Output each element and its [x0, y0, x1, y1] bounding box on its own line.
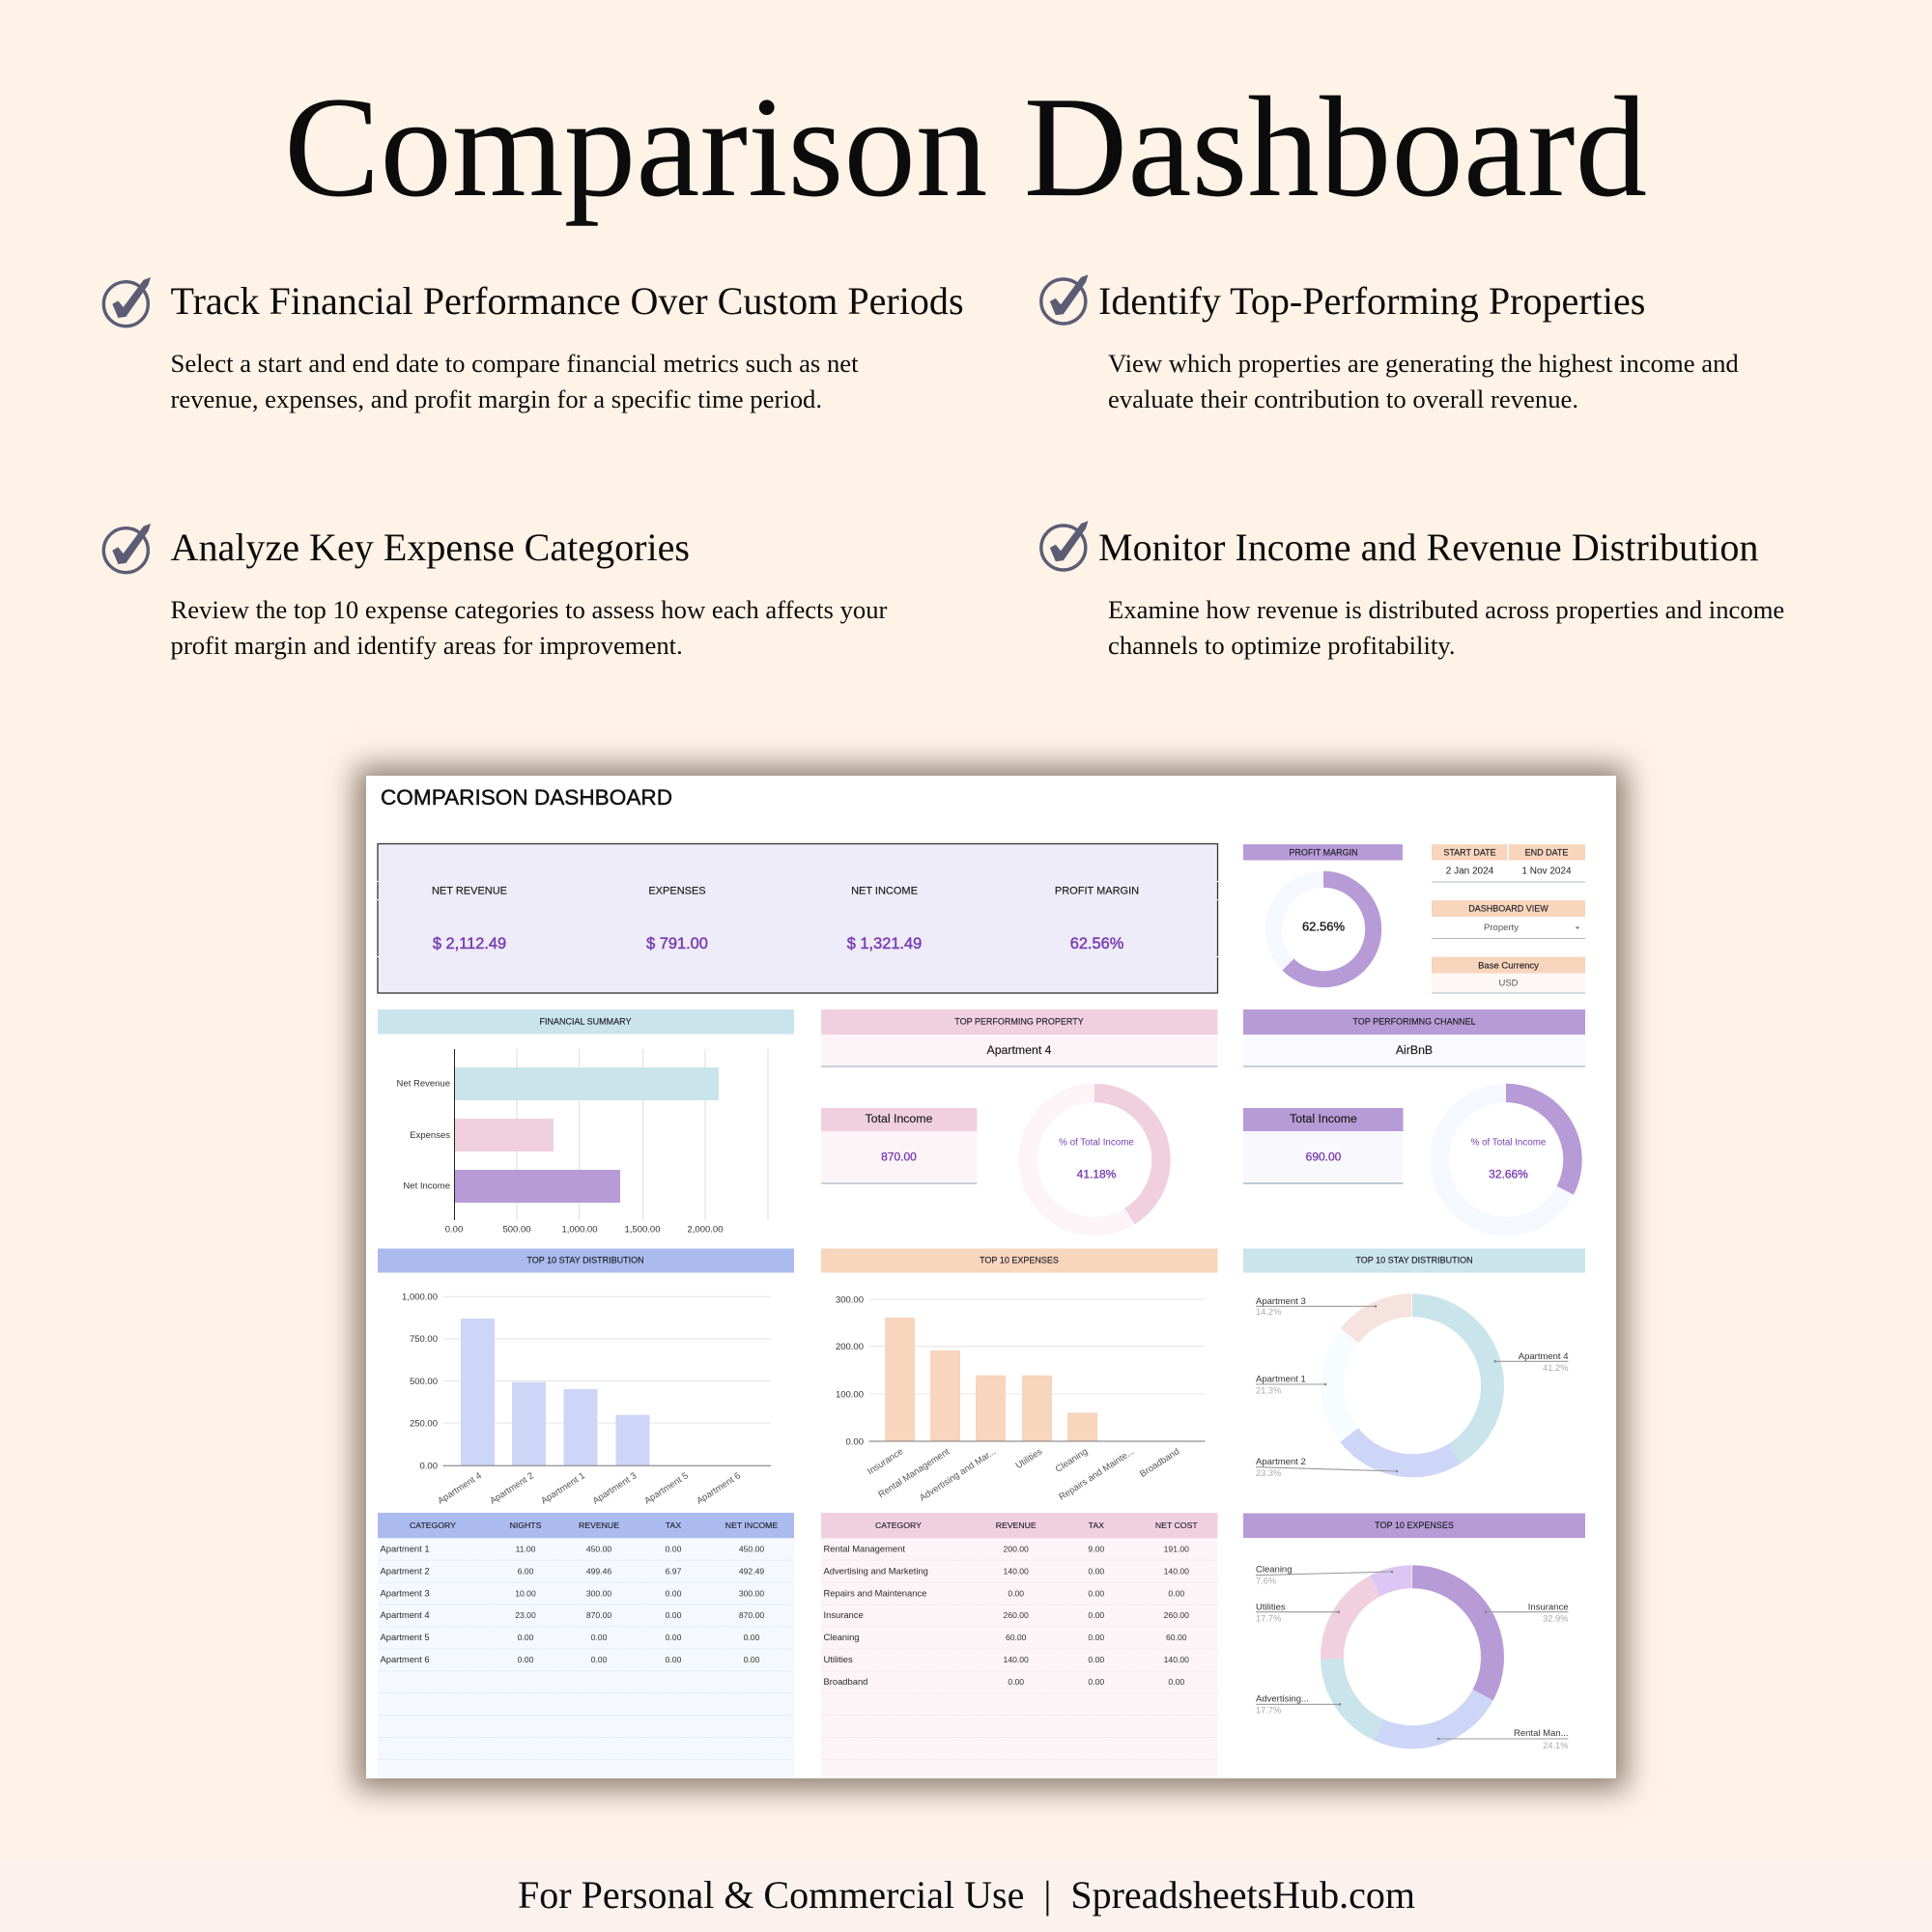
- donut: share of total income: % of Total Income: [1059, 1138, 1134, 1148]
- panel: date and view controls: END DATE: [1525, 848, 1568, 858]
- feature: monitor income distribution: [1041, 521, 1784, 660]
- table: expenses: 0.00: [1088, 1655, 1104, 1664]
- donut labels: stay distribution: Apartment 1: [1256, 1374, 1306, 1385]
- panel: profit margin donut: PROFIT MARGIN: [1289, 848, 1358, 858]
- panel: top performing property: Apartment 4: [987, 1043, 1052, 1057]
- panel: date and view controls: START DATE: [1443, 848, 1496, 858]
- table: expenses: 140.00: [1164, 1567, 1189, 1577]
- table: expenses: 260.00: [1004, 1610, 1029, 1620]
- description: revenue, expenses, and profit margin for a specific time period.: [170, 384, 822, 413]
- panel: stay distribution donut: TOP 10 STAY DISTRIBUTION: [1355, 1256, 1473, 1265]
- table: expenses: 140.00: [1004, 1567, 1029, 1577]
- panel: expenses donut: [1243, 1513, 1585, 1750]
- title: Comparison Dashboard: [284, 68, 1647, 227]
- panel: top performing channel: [1243, 1009, 1585, 1227]
- description: [170, 595, 888, 660]
- table: stay distribution: 300.00: [586, 1588, 611, 1598]
- table: stay distribution: Apartment 2: [381, 1565, 430, 1577]
- panel: expenses bars: [821, 1248, 1217, 1504]
- bar chart: financial summary: Net Revenue: [397, 1078, 450, 1090]
- panel: top performing property: TOP PERFORMING PROPERTY: [954, 1016, 1084, 1026]
- table: expenses: 140.00: [1004, 1655, 1029, 1664]
- total income card: [1243, 1108, 1403, 1183]
- bar chart: expenses: [836, 1294, 1206, 1504]
- bar chart: stay distribution: Apartment 5: [642, 1470, 691, 1507]
- table: stay distribution: 499.46: [586, 1567, 611, 1577]
- donut labels: expenses: Advertising...: [1256, 1694, 1309, 1704]
- table: stay distribution: 0.00: [666, 1588, 682, 1598]
- table: expenses: 0.00: [1088, 1677, 1104, 1687]
- KPI: profit margin: 62.56%: [1070, 935, 1123, 952]
- table: stay distribution: 492.49: [739, 1567, 764, 1577]
- table: stay distribution: 0.00: [591, 1633, 608, 1642]
- description: [1108, 349, 1739, 413]
- donut labels: stay distribution: 23.3%: [1256, 1468, 1281, 1478]
- table: expenses: 60.00: [1006, 1633, 1027, 1642]
- table: expenses: Utilities: [823, 1654, 853, 1664]
- bar chart: expenses: Advertising and Mar...: [918, 1446, 998, 1504]
- description: [1108, 595, 1784, 660]
- panel: date and view controls: [1432, 844, 1585, 993]
- donut labels: stay distribution: Apartment 3: [1256, 1296, 1306, 1307]
- KPI: net revenue: [432, 885, 507, 952]
- table: stay distribution: 0.00: [744, 1633, 760, 1642]
- donut labels: expenses: Cleaning: [1256, 1565, 1293, 1575]
- table: stay distribution: Apartment 6: [381, 1654, 430, 1664]
- description: View which properties are generating the highest income and: [1108, 349, 1739, 378]
- icon: check mark: [1041, 521, 1088, 570]
- bar chart: expenses: 100.00: [836, 1389, 864, 1401]
- table: expenses: CATEGORY: [875, 1520, 922, 1530]
- KPI: expenses: [646, 885, 708, 952]
- icon: check mark: [103, 277, 151, 327]
- heading: Monitor Income and Revenue Distribution: [1098, 526, 1758, 569]
- donut: share of total income: [1439, 1094, 1573, 1227]
- feature: track financial performance: [103, 277, 964, 413]
- panel: date and view controls: DASHBOARD VIEW: [1468, 904, 1548, 914]
- bar chart: financial summary: 500.00: [502, 1225, 531, 1235]
- table: expenses: NET COST: [1155, 1520, 1198, 1530]
- donut labels: stay distribution: Apartment 2: [1256, 1457, 1306, 1467]
- table: stay distribution: Apartment 3: [381, 1588, 430, 1598]
- bar chart: expenses: Cleaning: [1054, 1446, 1090, 1475]
- bar chart: stay distribution: 0.00: [419, 1461, 438, 1472]
- bar chart: expenses: Utilities: [1013, 1446, 1044, 1471]
- table: stay distribution: 10.00: [515, 1588, 536, 1598]
- panel: financial summary: FINANCIAL SUMMARY: [539, 1016, 632, 1026]
- panel: date and view controls: 2 Jan 2024: [1446, 866, 1494, 877]
- table: expenses: 260.00: [1164, 1610, 1189, 1620]
- donut labels: expenses: Rental Man...: [1514, 1728, 1569, 1739]
- total income card: [821, 1108, 978, 1183]
- bar chart: financial summary: 1,000.00: [562, 1225, 597, 1235]
- panel: profit margin donut: 62.56%: [1302, 920, 1345, 933]
- panel: financial summary: [378, 1009, 794, 1235]
- total income card: 870.00: [881, 1150, 917, 1163]
- feature: identify top-performing properties: [1041, 274, 1739, 413]
- table: stay distribution: 0.00: [591, 1655, 608, 1664]
- panel: top performing channel: TOP PERFORIMNG CHANNEL: [1352, 1016, 1476, 1026]
- table: stay distribution: NET INCOME: [725, 1520, 778, 1530]
- table: stay distribution: 11.00: [516, 1544, 536, 1553]
- table: expenses: Advertising and Marketing: [823, 1565, 928, 1577]
- donut labels: stay distribution: 21.3%: [1256, 1385, 1281, 1395]
- panel: profit margin donut: [1243, 844, 1403, 980]
- table: stay distribution: 0.00: [666, 1655, 682, 1664]
- dashboard title: COMPARISON DASHBOARD: [381, 785, 672, 810]
- donut labels: stay distribution: Apartment 4: [1519, 1351, 1569, 1362]
- table: expenses: 0.00: [1088, 1633, 1104, 1642]
- panel: top performing property: [821, 1009, 1217, 1227]
- table: stay distribution: 0.00: [744, 1655, 760, 1664]
- table: expenses: 0.00: [1088, 1567, 1104, 1577]
- table: stay distribution: 0.00: [666, 1544, 682, 1553]
- panel: expenses donut: TOP 10 EXPENSES: [1375, 1520, 1454, 1530]
- bar chart: expenses: Rental Management: [876, 1446, 952, 1500]
- bar chart: expenses: 0.00: [846, 1437, 864, 1447]
- KPI: profit margin: PROFIT MARGIN: [1055, 885, 1139, 896]
- bar chart: expenses: Insurance: [866, 1446, 905, 1477]
- donut: share of total income: [1028, 1094, 1161, 1227]
- bar chart: stay distribution: Apartment 2: [488, 1470, 536, 1507]
- donut: share of total income: 41.18%: [1077, 1167, 1117, 1180]
- KPI: net income: NET INCOME: [851, 885, 918, 896]
- table: stay distribution: CATEGORY: [410, 1520, 456, 1530]
- panel: stay distribution bars: TOP 10 STAY DISTRIBUTION: [526, 1256, 644, 1265]
- panel: date and view controls: USD: [1498, 978, 1519, 989]
- panel: expenses bars: TOP 10 EXPENSES: [980, 1256, 1059, 1265]
- icon: check mark: [103, 524, 151, 573]
- table: stay distribution: 0.00: [518, 1633, 534, 1642]
- donut labels: stay distribution: [1256, 1296, 1569, 1478]
- icon: check mark: [1041, 274, 1088, 324]
- bar chart: financial summary: [397, 1049, 768, 1235]
- table: expenses: Insurance: [823, 1609, 864, 1620]
- description: evaluate their contribution to overall revenue.: [1108, 384, 1578, 413]
- bar chart: financial summary: 0.00: [445, 1225, 463, 1235]
- KPI: expenses: EXPENSES: [648, 885, 706, 896]
- table: expenses: 9.00: [1088, 1544, 1104, 1553]
- panel: KPI summary: [378, 844, 1217, 993]
- KPI: expenses: $ 791.00: [646, 935, 708, 952]
- table: stay distribution: 0.00: [666, 1610, 682, 1620]
- panel: date and view controls: 1 Nov 2024: [1521, 866, 1572, 877]
- bar chart: stay distribution: 1,000.00: [402, 1293, 438, 1302]
- donut chart: stay distribution: [1332, 1305, 1492, 1465]
- table: stay distribution: 300.00: [739, 1588, 764, 1598]
- table: expenses: 0.00: [1008, 1588, 1024, 1598]
- bar chart: stay distribution: 750.00: [410, 1334, 438, 1345]
- table: stay distribution: 450.00: [739, 1544, 764, 1553]
- table: stay distribution: 23.00: [515, 1610, 536, 1620]
- donut labels: expenses: 17.7%: [1256, 1613, 1281, 1623]
- table: stay distribution: TAX: [666, 1520, 681, 1530]
- bar chart: expenses: Broadband: [1138, 1446, 1181, 1480]
- table: stay distribution: Apartment 1: [381, 1544, 430, 1553]
- table: expenses: REVENUE: [996, 1520, 1037, 1530]
- bar chart: financial summary: 1,500.00: [625, 1225, 660, 1235]
- bar chart: financial summary: 2,000.00: [688, 1225, 723, 1235]
- KPI: net income: $ 1,321.49: [847, 935, 922, 952]
- donut chart: expenses: [1332, 1577, 1492, 1737]
- table: stay distribution: 450.00: [586, 1544, 611, 1553]
- table: stay distribution: 0.00: [518, 1655, 534, 1664]
- table: stay distribution: Apartment 4: [381, 1609, 430, 1620]
- table: expenses: Rental Management: [823, 1544, 905, 1553]
- table: expenses: TAX: [1089, 1520, 1104, 1530]
- KPI: net income: [847, 885, 922, 952]
- footer band: For Personal & Commercial Use | SpreadsheetsHub.com: [518, 1873, 1415, 1917]
- KPI: net revenue: $ 2,112.49: [433, 935, 506, 952]
- table: stay distribution: REVENUE: [579, 1520, 619, 1530]
- bar chart: stay distribution: 500.00: [410, 1377, 438, 1387]
- description: Examine how revenue is distributed across properties and income: [1108, 595, 1784, 624]
- description: Review the top 10 expense categories to assess how each affects your: [170, 595, 888, 624]
- dashboard screenshot card: [366, 776, 1616, 1778]
- panel: top performing channel: AirBnB: [1396, 1043, 1433, 1057]
- donut labels: expenses: 24.1%: [1543, 1741, 1569, 1750]
- description: profit margin and identify areas for improvement.: [170, 631, 683, 660]
- heading: Track Financial Performance Over Custom Periods: [170, 279, 964, 323]
- panel: date and view controls: Base Currency: [1478, 960, 1539, 972]
- bar chart: financial summary: Net Income: [403, 1180, 450, 1192]
- heading: Identify Top-Performing Properties: [1098, 279, 1645, 323]
- bar chart: stay distribution: Apartment 4: [436, 1470, 484, 1507]
- bar chart: stay distribution: Apartment 6: [695, 1470, 743, 1507]
- description: Select a start and end date to compare financial metrics such as net: [170, 349, 859, 378]
- panel: date and view controls: Property: [1484, 923, 1519, 933]
- footer band: [0, 1860, 1932, 1932]
- table: expenses: 191.00: [1164, 1544, 1189, 1553]
- donut labels: expenses: Insurance: [1528, 1602, 1569, 1613]
- donut labels: stay distribution: 14.2%: [1256, 1307, 1281, 1317]
- panel: stay distribution bars: [378, 1248, 794, 1507]
- donut labels: expenses: 7.6%: [1256, 1577, 1276, 1586]
- KPI: profit margin: [1055, 885, 1139, 952]
- table: stay distribution: 870.00: [739, 1610, 764, 1620]
- table: expenses: 0.00: [1088, 1610, 1104, 1620]
- table: expenses: Cleaning: [823, 1632, 860, 1642]
- bar chart: stay distribution: Apartment 1: [539, 1470, 587, 1507]
- table: expenses: Broadband: [823, 1676, 867, 1687]
- table: expenses: 140.00: [1164, 1655, 1189, 1664]
- table: stay distribution: 870.00: [586, 1610, 611, 1620]
- table: stay distribution: 0.00: [666, 1633, 682, 1642]
- table: expenses: 0.00: [1168, 1677, 1184, 1687]
- panel: stay distribution donut: [1243, 1248, 1585, 1478]
- donut labels: expenses: 32.9%: [1543, 1613, 1569, 1623]
- description: channels to optimize profitability.: [1108, 631, 1456, 660]
- table: stay distribution: [378, 1513, 794, 1778]
- donut labels: expenses: 17.7%: [1256, 1706, 1281, 1716]
- description: [170, 349, 859, 413]
- donut labels: stay distribution: 41.2%: [1543, 1363, 1569, 1373]
- bar chart: expenses: Repairs and Mainte...: [1057, 1446, 1136, 1503]
- table: expenses: 0.00: [1008, 1677, 1024, 1687]
- bar chart: stay distribution: Apartment 3: [591, 1470, 639, 1507]
- table: expenses: 0.00: [1088, 1588, 1104, 1598]
- table: expenses: 200.00: [1004, 1544, 1029, 1553]
- total income card: Total Income: [866, 1112, 933, 1125]
- bar chart: expenses: 300.00: [836, 1294, 864, 1306]
- donut: share of total income: 32.66%: [1489, 1167, 1528, 1180]
- table: stay distribution: Apartment 5: [381, 1632, 430, 1642]
- bar chart: financial summary: Expenses: [410, 1130, 450, 1141]
- bar chart: stay distribution: [402, 1293, 771, 1507]
- table: expenses: Repairs and Maintenance: [823, 1588, 926, 1598]
- KPI: net revenue: NET REVENUE: [432, 885, 507, 896]
- table: stay distribution: 6.97: [666, 1567, 682, 1577]
- table: expenses: [821, 1513, 1217, 1778]
- bar chart: stay distribution: 250.00: [410, 1418, 438, 1430]
- heading: Analyze Key Expense Categories: [170, 526, 690, 569]
- table: stay distribution: NIGHTS: [510, 1520, 542, 1530]
- feature: analyze expense categories: [103, 524, 888, 660]
- donut: share of total income: % of Total Income: [1471, 1138, 1547, 1148]
- bar chart: expenses: 200.00: [836, 1342, 864, 1352]
- donut labels: expenses: Utilities: [1256, 1602, 1286, 1613]
- table: expenses: 60.00: [1166, 1633, 1187, 1642]
- donut labels: expenses: [1256, 1565, 1569, 1750]
- table: stay distribution: 6.00: [518, 1567, 534, 1577]
- total income card: Total Income: [1290, 1112, 1357, 1125]
- table: expenses: 0.00: [1168, 1588, 1184, 1598]
- total income card: 690.00: [1306, 1150, 1342, 1163]
